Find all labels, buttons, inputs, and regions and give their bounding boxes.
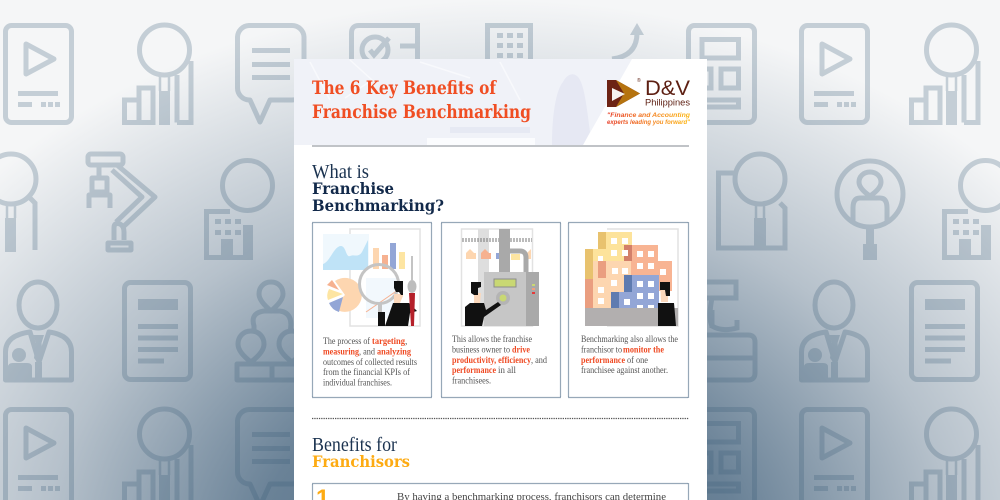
text: card 3 description: Benchmarking also allows the [581, 335, 678, 345]
text: card 2 description: business owner to [452, 346, 510, 356]
icon: office building top [488, 26, 530, 66]
panel: card 2 productivity [442, 222, 560, 398]
icon: seated people [237, 282, 310, 380]
icon: hand over desk [700, 282, 755, 380]
panel: benefit 1 [312, 484, 688, 500]
icon: video document bottom right [802, 410, 868, 500]
icon: text document left [124, 282, 190, 380]
text: card 1 description: The process of [323, 336, 371, 347]
icon: search bars top left [124, 25, 191, 125]
icon: news layout document [688, 26, 754, 122]
panel: card 1 targeting [312, 222, 432, 398]
icon: robot arm [88, 154, 155, 250]
text: card 1 description: outcomes of collected results [323, 357, 417, 368]
icon: search building right [944, 160, 1000, 260]
icon: search document right [718, 154, 785, 250]
text: card 2 description: performance [452, 366, 496, 376]
heading: What is Franchise Benchmarking: Franchise [312, 179, 394, 198]
title [312, 78, 531, 123]
icon: text document right [912, 282, 978, 380]
text: card 2 description: This allows the franchise [452, 334, 532, 345]
icon: video document top right [802, 26, 868, 122]
icon: businessman left [6, 282, 72, 381]
icon: search bars bottom left [124, 409, 191, 500]
icon: search document left [0, 154, 36, 252]
panel: infographic page [294, 59, 707, 500]
illustration: city buildings [585, 229, 678, 326]
icon: video document bottom left [6, 410, 72, 500]
icon: search building left [206, 160, 272, 260]
heading: Benefits for Franchisors [312, 434, 410, 471]
heading: What is Franchise Benchmarking: What is [312, 161, 369, 183]
icon: checklist document [352, 26, 420, 63]
heading: What is Franchise Benchmarking: Benchmarking? [312, 196, 444, 215]
text: card 1 description: targeting [372, 337, 405, 347]
text: card 2 description [452, 334, 547, 386]
text: card 3 description: of one [627, 355, 648, 366]
panel: header banner [294, 59, 632, 145]
heading: What is Franchise Benchmarking [312, 161, 444, 215]
icon: logo arrows [607, 80, 640, 107]
text: card 3 description: monitor the [623, 346, 664, 356]
text: card 3 description: franchisor to [581, 344, 622, 356]
text: card 1 description: analyzing [377, 348, 411, 358]
header rule [312, 145, 689, 147]
icon: chat bubble bottom [238, 410, 304, 500]
text: card 1 description: measuring [323, 348, 359, 358]
logo: D&V Philippines: experts leading you forward" [607, 120, 690, 126]
logo: D&V Philippines [607, 77, 690, 126]
text: card 2 description: drive [512, 346, 530, 356]
icon: businessman right [802, 282, 868, 381]
logo: D&V Philippines: D&V [645, 77, 690, 100]
title: Franchise Benchmarking [312, 102, 531, 123]
text: card 3 description [581, 335, 678, 376]
text: card 2 description: in all [498, 366, 516, 376]
title: The 6 Key Benefits of [312, 78, 497, 99]
text: card 3 description: performance [581, 356, 625, 366]
icon: search bars bottom right [912, 409, 978, 500]
icon: chat bubble top [238, 25, 304, 122]
chart illustration: analytics and magnifier [323, 229, 420, 326]
icon: news layout bottom right [688, 410, 754, 500]
section divider [312, 418, 689, 420]
text: card 3 description: franchisee against another. [581, 365, 668, 376]
text: card 1 description: , [405, 337, 407, 347]
logo: D&V Philippines: "Finance and Accounting [607, 113, 690, 119]
icon: growth arrow [612, 23, 644, 59]
illustration: machine operator [462, 229, 539, 326]
logo: D&V Philippines: Philippines [645, 98, 690, 108]
text: card 1 description: individual franchises. [323, 378, 392, 388]
text: card 2 description: , and [531, 356, 547, 366]
heading: Benefits for Franchisors: Benefits for [312, 434, 397, 456]
text: card 1 description: , and [359, 348, 375, 358]
icon: video document top left [6, 26, 72, 122]
text: card 2 description: franchisees. [452, 376, 491, 386]
text: card 2 description: productivity, efficiency [452, 356, 531, 366]
panel: card 3 monitoring [568, 222, 688, 398]
text: card 1 description [323, 336, 417, 388]
logo: D&V Philippines: ® [637, 77, 641, 84]
text: card 1 description: from the financial KPIs of [323, 367, 411, 378]
icon: search person [837, 161, 903, 260]
heading: Benefits for Franchisors: Franchisors [312, 452, 410, 471]
icon: search bars top right [912, 25, 978, 125]
